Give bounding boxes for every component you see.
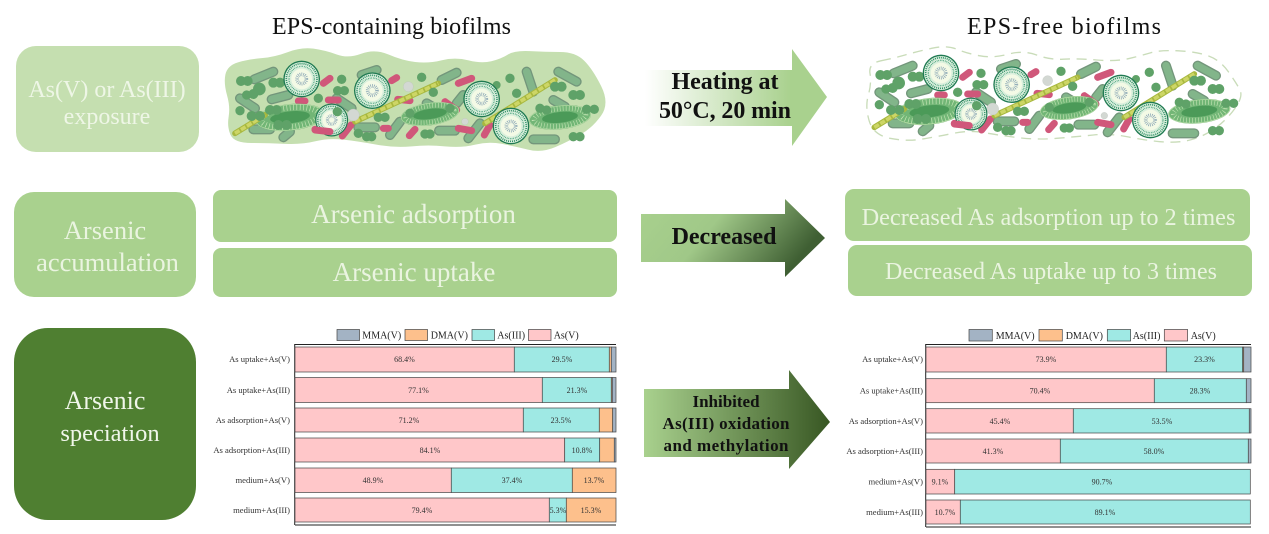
bar: As uptake+As(III): As uptake+As(III) [227, 385, 290, 395]
heading: EPS-free biofilms: EPS-free biofilms [967, 14, 1161, 40]
bar: As uptake+As(V) [229, 347, 616, 372]
bar: As adsorption+As(III) [213, 438, 616, 462]
box: arsenic uptake [213, 248, 617, 297]
bar: medium+As(V): 48.9% [363, 476, 384, 485]
legend: right chart: As(V) [1191, 331, 1216, 342]
arrow: inhibited: As(III) oxidation [662, 414, 790, 433]
legend: left chart: DMA(V) [431, 330, 468, 342]
bar: medium+As(V) EPS-free: 90.7% [1092, 478, 1113, 486]
arrow: decreased: Decreased [672, 224, 777, 250]
bar: As adsorption+As(III) EPS-free: 41.3% [983, 447, 1004, 456]
chart: EPS-free speciation [846, 330, 1251, 527]
bar: As uptake+As(V) EPS-free: 23.3% [1194, 355, 1215, 364]
bar: As adsorption+As(V): As adsorption+As(V) [216, 415, 290, 425]
arrow: heating [645, 49, 827, 146]
bar: As uptake+As(V) EPS-free: 73.9% [1036, 355, 1057, 364]
bar: As adsorption+As(V) EPS-free: As adsorption+As(V) [849, 416, 923, 426]
panel: arsenic speciation: speciation [60, 420, 160, 447]
bar: medium+As(V) EPS-free [868, 469, 1250, 494]
legend: left chart [337, 330, 579, 342]
bar: As adsorption+As(V) EPS-free: 53.5% [1152, 417, 1173, 426]
panel: arsenic accumulation: accumulation [36, 247, 179, 277]
legend: right chart: As(III) [1133, 331, 1160, 342]
legend: left chart: As(V) [554, 330, 579, 342]
bar: As uptake+As(III): 77.1% [408, 386, 429, 395]
bar: medium+As(III) EPS-free: 10.7% [935, 508, 956, 517]
bar: medium+As(III): 5.3% [550, 506, 567, 515]
bar: As uptake+As(III): 21.3% [567, 386, 588, 395]
bar: As uptake+As(V) EPS-free [862, 347, 1251, 372]
bar: medium+As(III) EPS-free [866, 500, 1250, 524]
bar: As uptake+As(III) EPS-free: 70.4% [1030, 386, 1051, 396]
box: arsenic adsorption [213, 190, 617, 242]
legend: right chart [969, 330, 1216, 342]
bar: As uptake+As(III) EPS-free [860, 379, 1251, 403]
bar: medium+As(III): 79.4% [412, 506, 433, 515]
bar: medium+As(III): 15.3% [581, 506, 602, 515]
bar: As uptake+As(V): 68.4% [394, 355, 415, 364]
bar: medium+As(V): 13.7% [584, 476, 605, 485]
arrow: heating: 50°C, 20 min [659, 98, 791, 124]
bar: As adsorption+As(V): 23.5% [551, 416, 572, 425]
box: arsenic adsorption: Arsenic adsorption [311, 199, 516, 229]
bar: As adsorption+As(III) EPS-free [846, 439, 1251, 463]
bar: medium+As(III): medium+As(III) [233, 505, 290, 515]
bar: As adsorption+As(V) [216, 408, 616, 432]
bar: As adsorption+As(V): 71.2% [399, 416, 420, 425]
bar: medium+As(V) EPS-free: 9.1% [932, 478, 949, 486]
chart: EPS-containing speciation [213, 330, 616, 525]
bar: medium+As(III) [233, 498, 616, 522]
box: decreased adsorption [845, 189, 1250, 241]
bar: medium+As(III) EPS-free: 89.1% [1095, 508, 1116, 517]
bar: medium+As(V): 37.4% [502, 476, 523, 485]
legend: left chart: As(III) [497, 330, 525, 342]
bar: As uptake+As(III) EPS-free: 28.3% [1190, 386, 1211, 396]
box: decreased uptake [848, 245, 1252, 296]
bar: As uptake+As(V): As uptake+As(V) [229, 354, 290, 364]
bar: As adsorption+As(III): 10.8% [572, 446, 593, 455]
box: arsenic uptake: Arsenic uptake [333, 257, 495, 287]
bar: As uptake+As(V) EPS-free: As uptake+As(V) [862, 354, 923, 364]
bar: medium+As(V) [236, 468, 616, 492]
bar: As adsorption+As(V) EPS-free: 45.4% [990, 417, 1011, 426]
bar: As adsorption+As(III) EPS-free: 58.0% [1144, 447, 1165, 456]
legend: left chart: MMA(V) [362, 330, 401, 342]
arrow: decreased [641, 199, 825, 277]
arrow: inhibited: Inhibited [692, 392, 760, 411]
bar: medium+As(III) EPS-free: medium+As(III) [866, 507, 923, 517]
panel: arsenic speciation [14, 328, 196, 520]
illustration: EPS-free biofilm [867, 47, 1241, 142]
bar: As uptake+As(III) EPS-free: As uptake+As(III) [860, 386, 923, 396]
legend: right chart: DMA(V) [1066, 331, 1103, 342]
box: decreased adsorption: Decreased As adsorption up to 2 times [862, 204, 1235, 231]
arrow: heating: Heating at [672, 69, 778, 95]
panel: As exposure [16, 46, 199, 152]
bar: medium+As(V): medium+As(V) [236, 475, 290, 485]
bar: As adsorption+As(III): As adsorption+As(III) [213, 445, 290, 455]
arrow: inhibited: and methylation [664, 436, 789, 455]
bar: As adsorption+As(III) EPS-free: As adsorption+As(III) [846, 446, 923, 456]
legend: right chart: MMA(V) [996, 331, 1035, 342]
illustration: EPS-containing biofilm [226, 50, 604, 150]
bar: As adsorption+As(V) EPS-free [849, 409, 1251, 433]
bar: As uptake+As(V): 29.5% [552, 355, 573, 364]
panel: As exposure: As(V) or As(III) [28, 77, 186, 103]
panel: arsenic accumulation: Arsenic [64, 215, 146, 245]
panel: arsenic speciation: Arsenic [65, 386, 145, 415]
bar: As uptake+As(III) [227, 378, 616, 402]
panel: arsenic accumulation [14, 192, 196, 297]
panel: As exposure: exposure [64, 104, 150, 130]
bar: As adsorption+As(III): 84.1% [420, 446, 441, 455]
heading: EPS-containing biofilms: EPS-containing biofilms [272, 14, 511, 40]
box: decreased uptake: Decreased As uptake up to 3 times [885, 259, 1217, 285]
bar: medium+As(V) EPS-free: medium+As(V) [868, 476, 923, 486]
arrow: inhibited [644, 370, 830, 469]
